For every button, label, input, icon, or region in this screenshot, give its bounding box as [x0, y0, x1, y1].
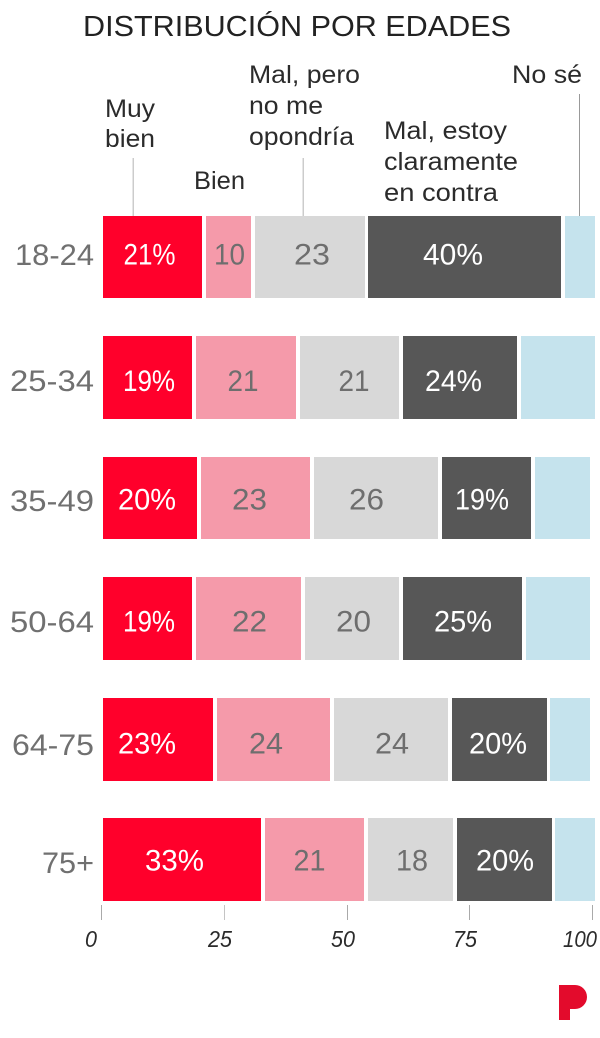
label: Bien: Bien — [194, 167, 245, 195]
row: 75+: 18 — [396, 844, 428, 878]
row: 64-75: 24 — [249, 728, 283, 760]
row: 35-49: 23 — [232, 484, 267, 516]
label: Mal, pero no me opondría: Mal, pero — [249, 61, 360, 89]
row: 35-49: 35-49 — [10, 485, 94, 518]
legend labels — [105, 61, 582, 219]
row: 64-75 — [12, 698, 590, 781]
row: 25-34: 19% — [123, 365, 175, 398]
row: 50-64 — [10, 577, 590, 660]
label: Mal, pero no me opondría: opondría — [249, 123, 354, 151]
label: Muy bien: Muy — [105, 95, 156, 123]
x axis — [85, 905, 597, 952]
row: 75+: 20% — [476, 844, 534, 878]
row: 18-24: 23 — [294, 238, 330, 272]
row: 50-64: 50-64 — [10, 606, 94, 639]
row: 18-24: 10 — [214, 238, 245, 272]
row: 18-24 — [15, 216, 595, 298]
row: 75+: 33% — [145, 844, 204, 878]
label: No sé: No sé — [512, 61, 582, 89]
row: 25-34: 21 — [228, 365, 258, 398]
label: Mal, pero no me opondría: no me — [249, 92, 323, 120]
row: 50-64: 25% — [434, 606, 492, 638]
icon: logo P — [559, 985, 587, 1020]
row: 25-34: 24% — [425, 365, 482, 398]
row: 50-64: 19% — [123, 606, 175, 638]
row: 50-64: 22 — [232, 606, 267, 638]
label: Mal, pero no me opondría — [249, 61, 360, 218]
row: 25-34: 21 — [338, 365, 370, 398]
x axis: 75 — [453, 926, 477, 952]
row: 75+: 21 — [294, 844, 326, 878]
row: 64-75: 24 — [375, 728, 409, 760]
row: 35-49: 19% — [455, 484, 509, 516]
title: DISTRIBUCIÓN POR EDADES — [83, 11, 511, 43]
row: 64-75: 23% — [118, 728, 176, 760]
label: Mal, estoy claramente en contra — [384, 117, 518, 207]
x axis: 50 — [331, 926, 355, 952]
x axis: 25 — [207, 926, 232, 952]
row: 75+ — [42, 818, 595, 901]
row: 75+: 75+ — [42, 847, 94, 880]
row: 18-24: 21% — [124, 238, 176, 272]
label: Muy bien — [105, 95, 156, 216]
label: Muy bien: bien — [105, 125, 155, 153]
row: 50-64: 20 — [336, 606, 371, 638]
row: 64-75: 20% — [469, 728, 527, 760]
label: Mal, estoy claramente en contra: en contra — [384, 179, 498, 207]
label: Mal, estoy claramente en contra: claramente — [384, 148, 518, 176]
row: 18-24: 40% — [423, 238, 483, 272]
row: 64-75: 64-75 — [12, 729, 94, 762]
x axis: 0 — [85, 926, 97, 952]
row: 35-49: 20% — [118, 484, 176, 516]
row: 25-34 — [10, 336, 595, 419]
row: 35-49 — [10, 457, 590, 539]
row: 25-34: 25-34 — [10, 365, 94, 398]
label: Mal, estoy claramente en contra: Mal, estoy — [384, 117, 508, 145]
row: 35-49: 26 — [349, 484, 384, 516]
row: 18-24: 18-24 — [15, 239, 94, 272]
